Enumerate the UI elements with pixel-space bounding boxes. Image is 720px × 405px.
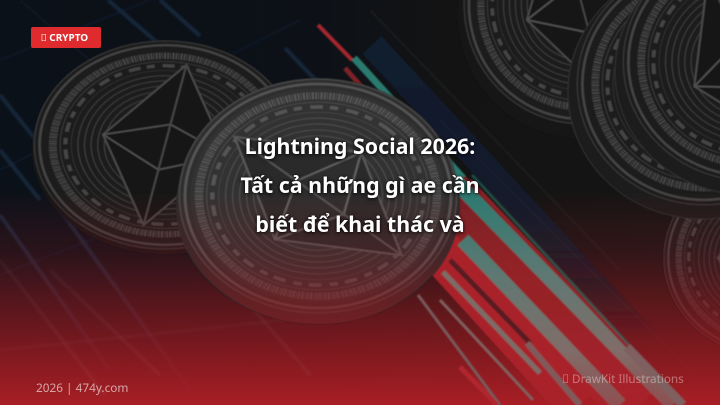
faint chart lines over red xyxy=(0,260,380,395)
title: Tất cả những gì ae cần xyxy=(240,171,480,200)
category badge:  CRYPTO xyxy=(41,30,88,44)
image credit:  DrawKit Illustrations xyxy=(562,371,684,387)
coin: stack lower xyxy=(568,0,720,219)
category badge xyxy=(31,27,101,48)
title xyxy=(240,132,481,239)
title: biết để khai thác và xyxy=(255,210,465,239)
coin: left xyxy=(8,20,322,270)
coin: stack upper xyxy=(615,0,720,195)
coin: top right rear xyxy=(458,0,702,138)
right coin stack xyxy=(436,0,720,356)
coin: lower right xyxy=(663,160,720,356)
coin: center xyxy=(121,30,515,362)
title: Lightning Social 2026: xyxy=(245,132,475,161)
candlestick chart streaks xyxy=(318,25,683,405)
red gradient over coins xyxy=(54,206,720,345)
footer: year and site: 2026 | 474y.com xyxy=(36,380,128,396)
